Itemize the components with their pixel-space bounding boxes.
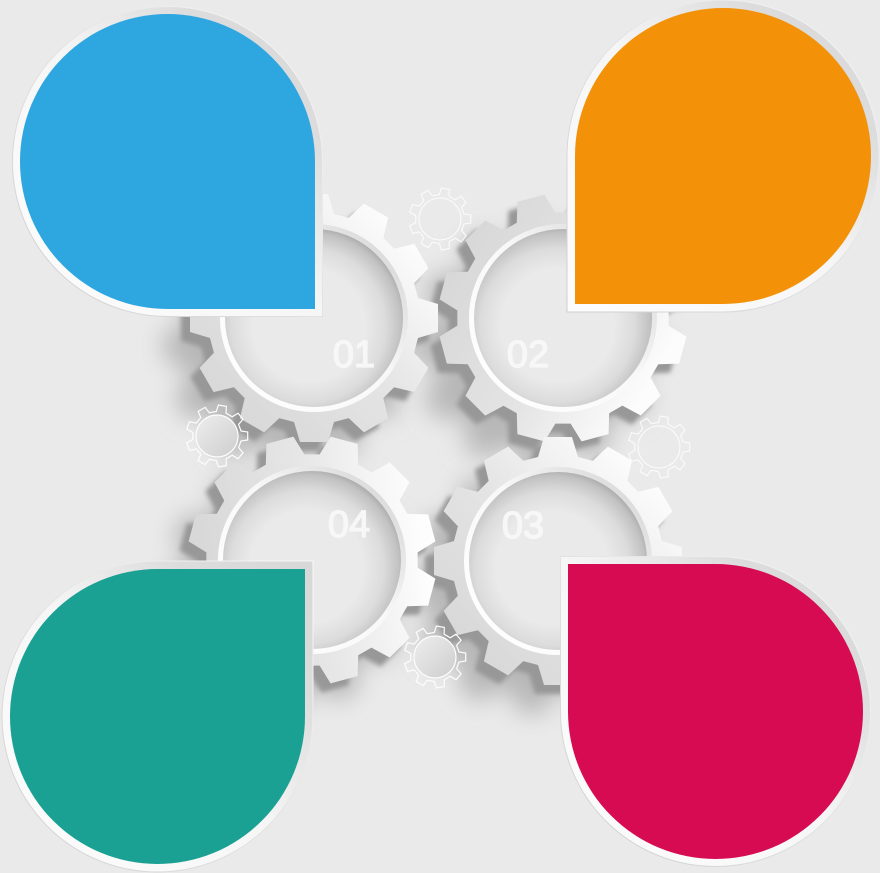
gear 03 — [434, 437, 682, 685]
icon: small gear right — [629, 416, 690, 478]
label 02: 02 — [507, 334, 549, 376]
panel: teal drop — [10, 569, 305, 864]
gear 02 — [411, 166, 715, 470]
gear 01 — [190, 194, 438, 442]
label 04: 04 — [328, 504, 370, 546]
panel: red drop — [568, 564, 863, 859]
icon: small gear top — [410, 188, 471, 250]
icon: small gear bottom — [405, 626, 466, 688]
gear shadows — [151, 175, 706, 721]
panel: blue drop — [20, 14, 315, 309]
label 03: 03 — [502, 505, 544, 547]
panel: orange drop — [575, 8, 871, 304]
icon: small gear left — [187, 405, 248, 467]
label 01: 01 — [333, 334, 375, 376]
gear 04 — [160, 408, 464, 712]
